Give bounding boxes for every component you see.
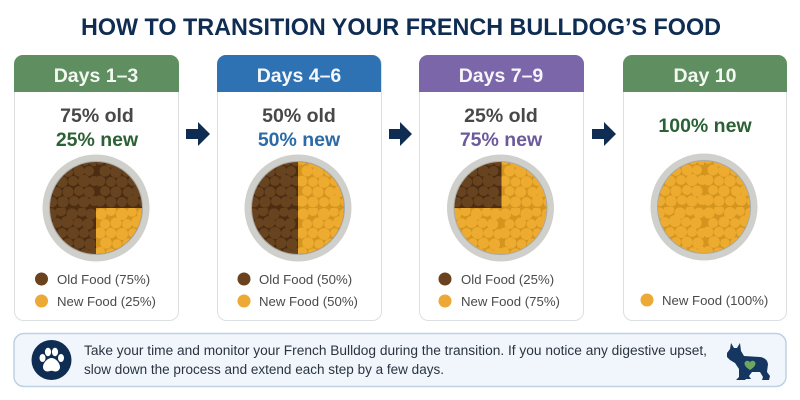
header: days 7-9 xyxy=(419,55,584,92)
tip text: slow down the process and extend each step by a few days. xyxy=(84,362,444,377)
ratio text: days 1-3: 25% new xyxy=(56,129,139,151)
panel: days 7-9 xyxy=(419,55,584,320)
legend: day 10: New Food (100%) xyxy=(662,293,768,308)
ratio text: days 7-9: 25% old xyxy=(464,105,538,127)
bowl: 100% new xyxy=(650,154,758,260)
panel: day 10 xyxy=(623,55,787,320)
bowl: 75% old, 25% new xyxy=(42,154,150,262)
bowl: 25% old, 75% new xyxy=(447,154,554,262)
header: day 10 xyxy=(623,55,787,92)
legend: days 1-3: New Food (25%) xyxy=(57,294,156,309)
ratio text: day 10: 100% new xyxy=(658,115,752,137)
legend: days 4-6: Old Food (50%) xyxy=(259,272,352,287)
icon: french bulldog with heart xyxy=(727,343,770,380)
ratio text: days 4-6: 50% old xyxy=(262,105,336,127)
icon: paw xyxy=(32,340,72,380)
legend: days 1-3 xyxy=(35,272,156,309)
arrow: step 1 to 2 xyxy=(186,122,210,146)
tip text xyxy=(84,343,707,377)
ratio text: days 4-6 xyxy=(258,105,341,151)
legend: days 4-6: New Food (50%) xyxy=(259,294,358,309)
legend: days 7-9: New Food (75%) xyxy=(461,294,560,309)
header: days 7-9: Days 7–9 xyxy=(459,65,543,87)
ratio text: days 7-9: 75% new xyxy=(460,129,543,151)
ratio text: days 1-3: 75% old xyxy=(60,105,134,127)
callout: monitoring tip xyxy=(14,334,786,386)
ratio text: days 7-9 xyxy=(460,105,543,151)
header: days 4-6 xyxy=(217,55,381,92)
arrow: step 3 to 4 xyxy=(592,122,616,146)
header: days 1-3: Days 1–3 xyxy=(54,65,138,87)
header: days 4-6: Days 4–6 xyxy=(257,65,341,87)
panel: days 1-3 xyxy=(14,55,179,320)
legend: days 7-9 xyxy=(438,272,560,309)
ratio text: days 4-6: 50% new xyxy=(258,129,341,151)
legend: days 4-6 xyxy=(238,272,358,309)
header: days 1-3 xyxy=(14,55,179,92)
legend: days 1-3: Old Food (75%) xyxy=(57,272,150,287)
tip text: Take your time and monitor your French Bulldog during the transition. If you notice any digestive upset, xyxy=(84,343,707,358)
arrow: step 2 to 3 xyxy=(389,122,412,146)
header: day 10: Day 10 xyxy=(674,65,737,87)
legend: days 7-9: Old Food (25%) xyxy=(461,272,554,287)
title: HOW TO TRANSITION YOUR FRENCH BULLDOG’S FOOD xyxy=(81,14,721,41)
ratio text: days 1-3 xyxy=(56,105,139,151)
panel: days 4-6 xyxy=(217,55,382,320)
bowl: 50% old, 50% new xyxy=(244,154,352,262)
